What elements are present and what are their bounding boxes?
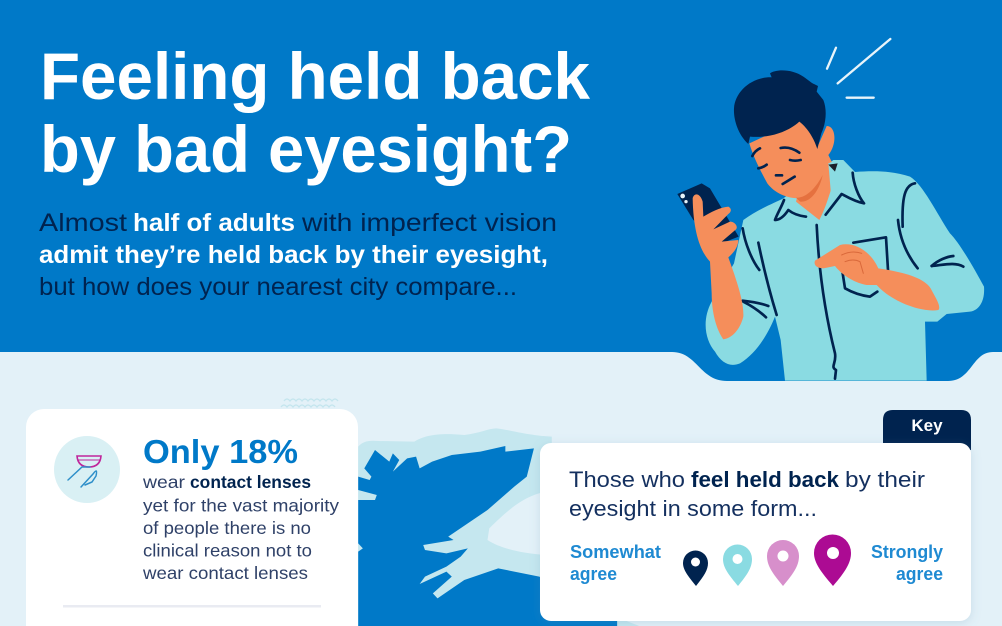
icon: contact lens on finger [54,436,120,503]
blue header band [0,0,1002,381]
stat body text: clinical reason not to [143,540,312,560]
map: lake patch [487,492,546,555]
face features [752,148,801,184]
face [749,120,824,198]
legend heading: eyesight in some form... [569,496,817,521]
label: strongly agree: agree [896,564,943,584]
intro text: but how does your nearest city compare... [39,273,517,301]
phone [677,183,739,243]
legend heading [569,467,925,521]
stat body text [142,472,339,583]
intro text [39,209,557,301]
stat body text: wear [142,472,185,492]
illustration: man looking at phone [677,39,984,381]
panel: contact lens fact [26,409,358,626]
icon: surprise lines [827,39,890,98]
shirt [706,160,984,381]
key tab [883,410,971,450]
collar [775,160,864,220]
right arm and hand [815,244,939,310]
map: light shelf [358,428,639,626]
intro text: Almost [39,209,127,237]
label: somewhat agree: agree [570,564,617,584]
map: land [358,446,617,626]
stat body text: yet for the vast majority [143,496,339,516]
pin: navy [683,550,708,586]
legend heading: Those who [569,467,685,492]
intro text: admit they’re held back by their eyesight, [39,241,548,269]
stat heading: Only 18% [143,433,298,470]
stat body text: of people there is no [143,518,311,538]
wave decoration [281,399,338,407]
label: somewhat agree: Somewhat [570,542,661,562]
hair [734,70,826,149]
pin: teal [723,544,752,586]
label: somewhat agree [570,542,661,584]
shirt creases [743,183,963,379]
neck and ear [796,126,837,220]
title [40,39,590,186]
left arm and hand [693,194,743,339]
legend heading: feel held back [691,467,840,492]
stat body text: contact lenses [190,472,311,492]
key tab: Key [911,416,943,435]
pin: magenta [814,534,851,586]
intro text: with imperfect vision [301,209,557,237]
pin: pink [767,540,799,586]
intro text: half of adults [133,209,295,237]
title: by bad eyesight? [40,112,572,186]
label: strongly agree [871,542,943,584]
legend heading: by their [845,467,925,492]
map of Scotland coast [358,428,639,626]
title: Feeling held back [40,39,590,113]
label: strongly agree: Strongly [871,542,943,562]
stat body text: wear contact lenses [142,563,308,583]
panel: key legend [540,443,971,621]
